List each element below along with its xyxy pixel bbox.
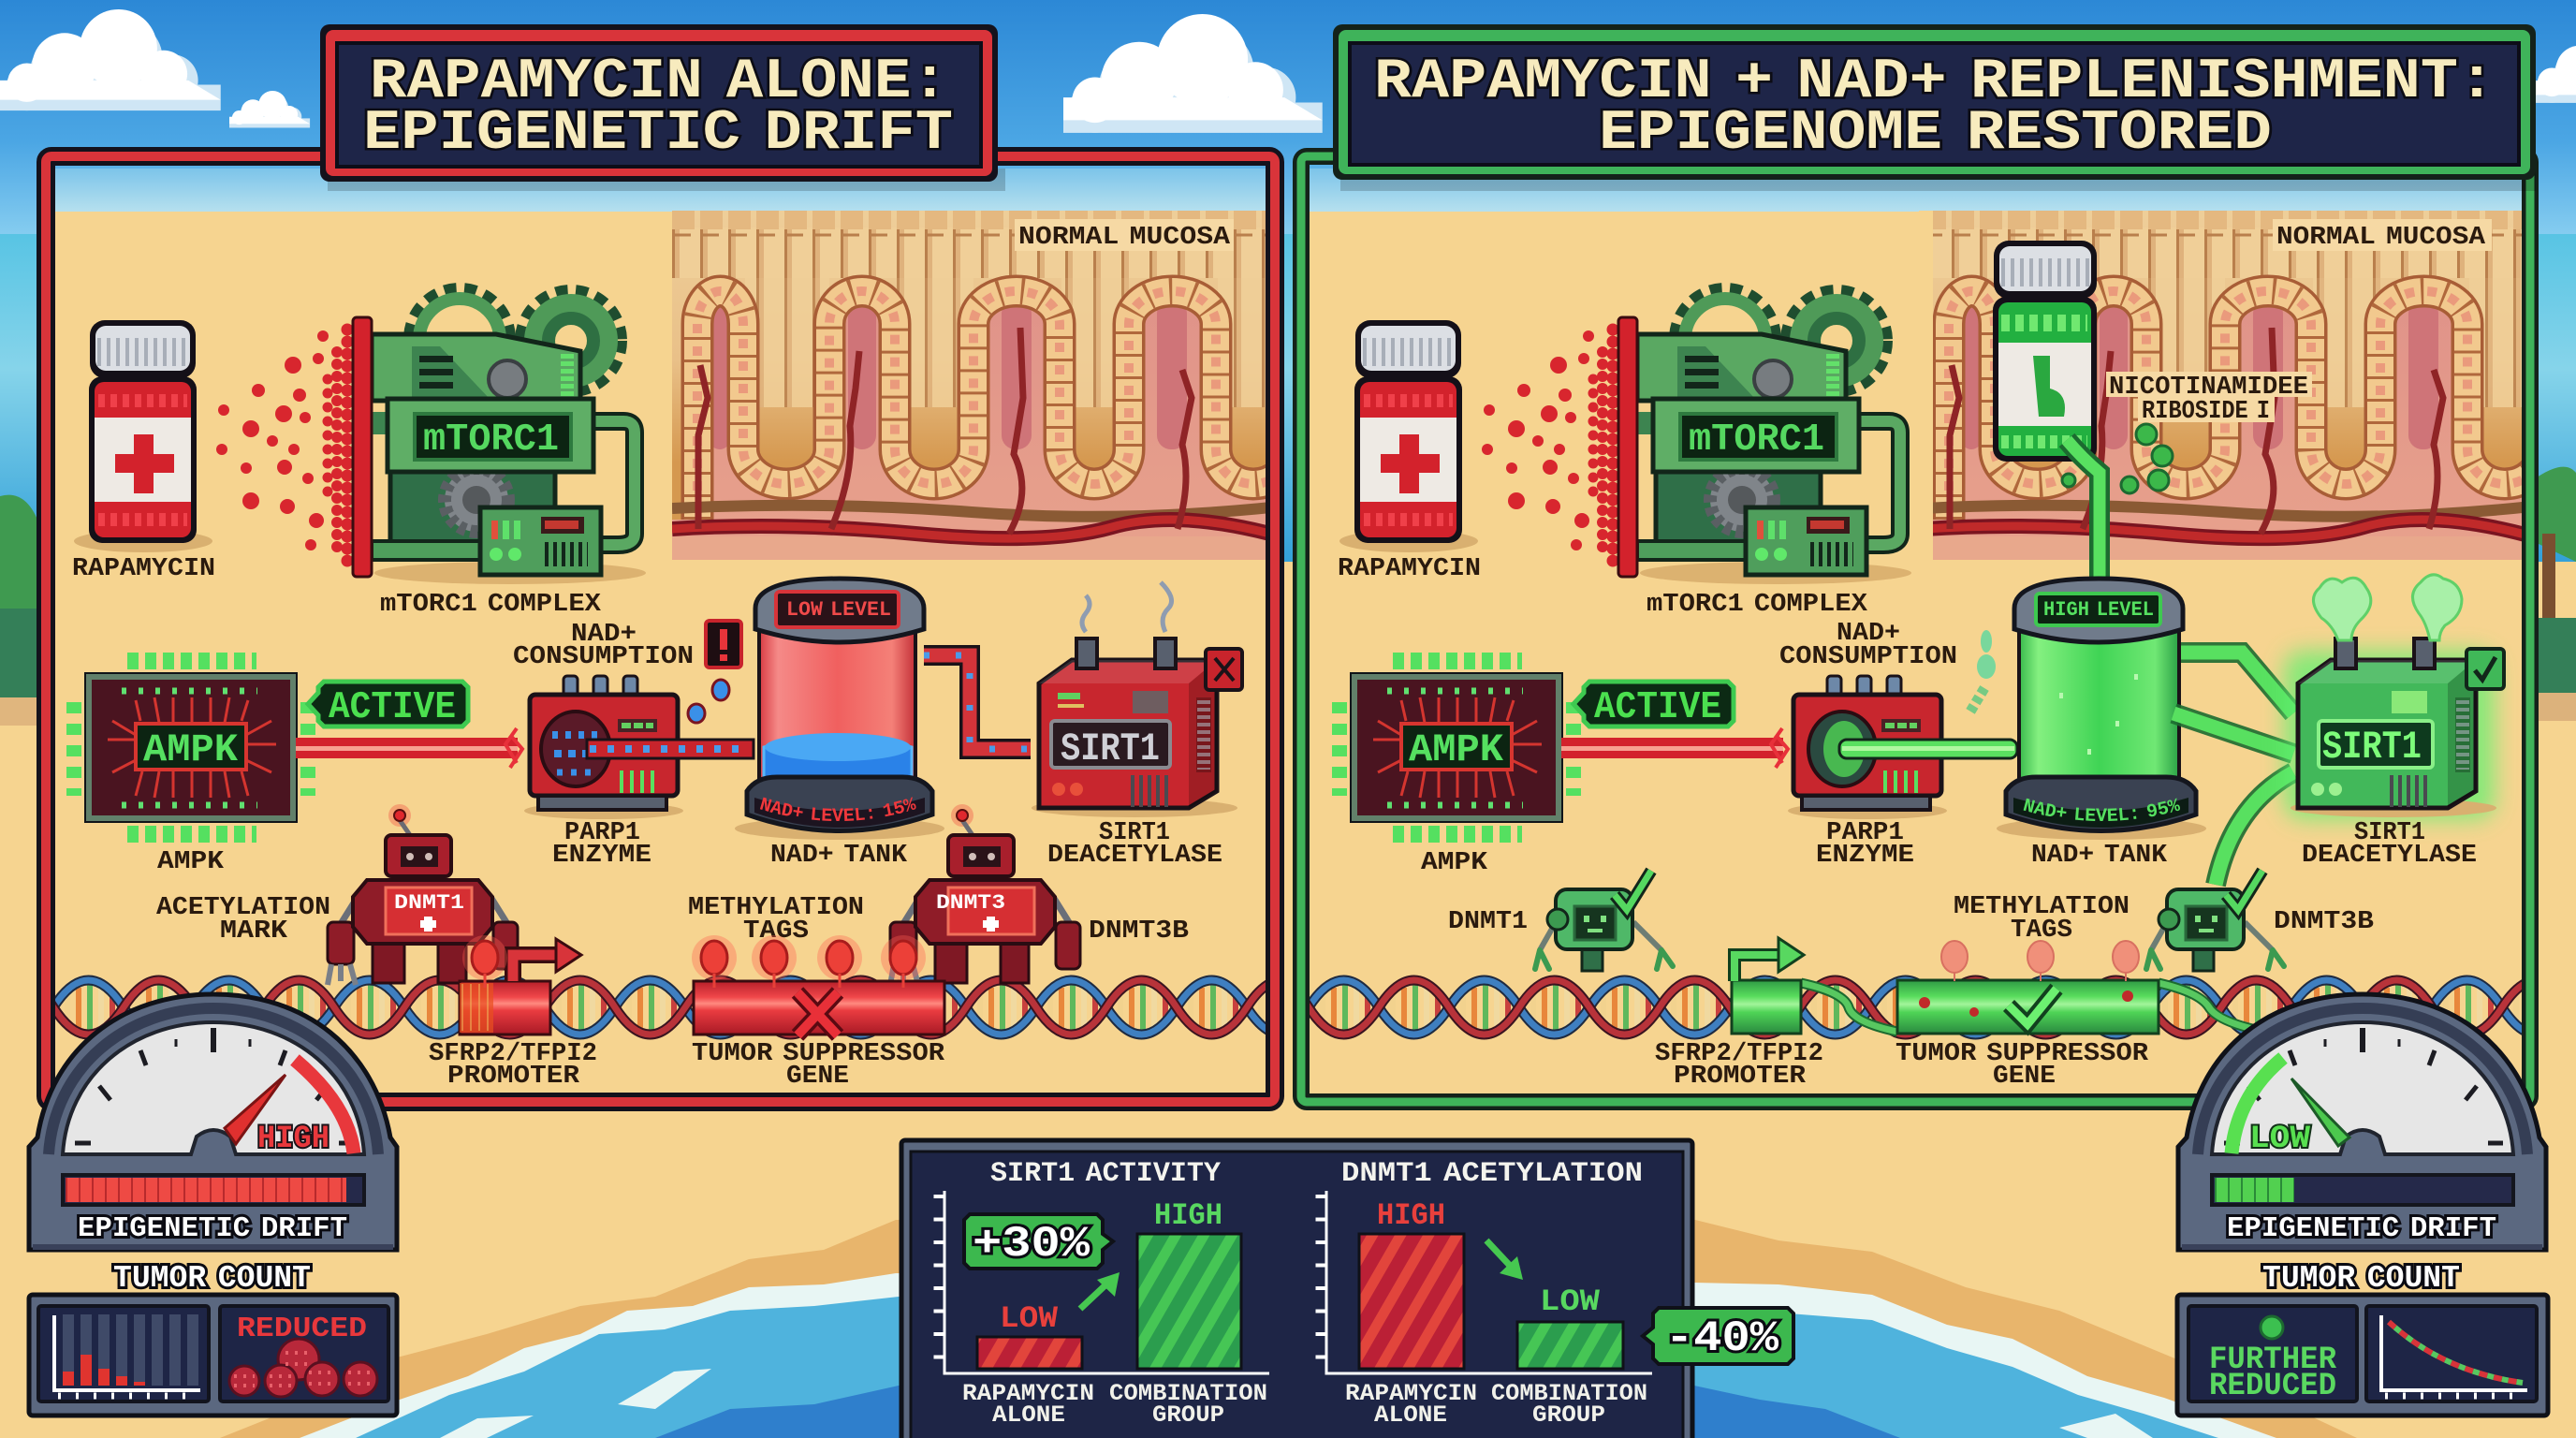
label: methylation tags right: TAGS xyxy=(2011,917,2072,945)
label: normal mucosa: NORMAL MUCOSA xyxy=(1018,224,1231,252)
green pipes to SIRT1 xyxy=(2174,653,2293,885)
panel: tumor count left xyxy=(29,1295,397,1416)
line chart xyxy=(2381,1315,2527,1396)
label: nicotinamide riboside: RIBOSIDE I xyxy=(2142,398,2270,426)
icon: X highlight xyxy=(798,992,838,1035)
label: methylation tags right: METHYLATION xyxy=(1954,893,2130,921)
labels: DNMT1 x axis: GROUP xyxy=(1532,1401,1605,1429)
label: SIRT1 deacetylase: DEACETYLASE xyxy=(1047,842,1222,870)
gauge bar xyxy=(66,1178,346,1202)
label: SIRT1 deacetylase: SIRT1 xyxy=(1099,819,1170,847)
icon: rapamycin bottle xyxy=(74,320,212,552)
label: PARP1 enzyme: ENZYME xyxy=(552,842,651,870)
AMPK chip right xyxy=(1339,661,1573,834)
bar: SIRT1 low xyxy=(977,1337,1082,1369)
label: SIRT1 deacetylase right xyxy=(2302,819,2477,870)
bar: SIRT1 high xyxy=(1137,1234,1241,1369)
gauge: epigenetic drift high xyxy=(29,994,397,1250)
gauge: epigenetic drift low xyxy=(2178,994,2546,1250)
label: tumor suppressor gene right: TUMOR SUPPRESSOR xyxy=(1895,1040,2149,1068)
NAD+ tank high xyxy=(1997,577,2206,840)
disc green xyxy=(1808,712,1876,786)
label: AMPK right: AMPK xyxy=(1421,849,1488,877)
label: DNMT3B: DNMT3B xyxy=(1089,917,1189,946)
label: NAD+ consumption: NAD+ xyxy=(571,621,637,649)
label: NAD+ consumption right: NAD+ xyxy=(1837,620,1900,648)
label: DNMT3B right: DNMT3B xyxy=(2274,908,2374,936)
label: SFRP2/TFPI2 promoter right: PROMOTER xyxy=(1674,1063,1807,1091)
NAD+ tank low xyxy=(735,577,944,840)
label: acetylation mark xyxy=(156,894,330,946)
palm right xyxy=(2537,467,2576,721)
label: AMPK: AMPK xyxy=(157,848,225,876)
text: high level: HIGH LEVEL xyxy=(2043,598,2154,622)
label: nicotinamide riboside: NICOTINAMIDEE xyxy=(2109,374,2308,402)
promoter cylinder green xyxy=(1732,980,1801,1034)
tag: active xyxy=(308,682,468,726)
bar chart tumor count xyxy=(54,1315,200,1396)
pipe: tank to PARP1 right xyxy=(1839,740,2017,758)
gauge needle xyxy=(225,1075,285,1144)
robot DNMT1 xyxy=(328,804,518,985)
label backdrop: normal mucosa right xyxy=(2273,219,2492,251)
heading: rapamycin alone: EPIGENETIC DRIFT xyxy=(363,102,953,166)
panel background left xyxy=(53,169,1268,1095)
icon: check on gene xyxy=(2009,989,2056,1024)
text: mTORC1 display right: mTORC1 xyxy=(1689,418,1824,462)
heading: rapamycin alone: RAPAMYCIN ALONE: xyxy=(370,51,948,114)
label: methylation tags: TAGS xyxy=(743,917,809,946)
arrow: up xyxy=(1080,1272,1120,1309)
panel border green xyxy=(1301,156,2530,1102)
mucosa edge cover xyxy=(1919,211,1933,560)
label: tumor count left: TUMOR COUNT xyxy=(113,1261,311,1296)
pipe: tank to SIRT1 xyxy=(924,655,1031,749)
residual methyl dots xyxy=(1919,990,2133,1017)
labels: DNMT1 x axis: COMBINATION xyxy=(1491,1380,1647,1407)
gauge arc green xyxy=(2232,1058,2283,1153)
cloud small xyxy=(229,91,310,127)
text: low green: LOW xyxy=(1540,1284,1601,1319)
text: SIRT1 display right: SIRT1 xyxy=(2322,725,2422,770)
cloud top right xyxy=(1063,14,1323,133)
arrow: promoter right xyxy=(1734,938,1804,981)
panel border red xyxy=(46,156,1275,1102)
label: SIRT1 deacetylase right: DEACETYLASE xyxy=(2302,842,2477,870)
text: reduced: REDUCED xyxy=(237,1313,367,1345)
label: PARP1 enzyme: PARP1 xyxy=(564,819,640,847)
text: further reduced: FURTHER xyxy=(2209,1343,2337,1378)
labels: SIRT1 x axis: RAPAMYCIN xyxy=(962,1380,1094,1407)
label: DNMT1 right: DNMT1 xyxy=(1448,908,1528,936)
text: DNMT3 chest: DNMT3 xyxy=(936,891,1005,915)
robot DNMT3B green xyxy=(2146,871,2284,971)
labels: DNMT1 x axis: ALONE xyxy=(1374,1401,1447,1429)
label: acetylation mark: MARK xyxy=(220,917,288,946)
label: tumor count right: TUMOR COUNT xyxy=(2262,1261,2460,1296)
label: SFRP2/TFPI2 promoter right xyxy=(1655,1040,1823,1091)
methylation tags faded xyxy=(1941,941,2139,981)
labels: SIRT1 x axis: COMBINATION xyxy=(1109,1380,1267,1407)
SIRT1 machine inactive xyxy=(1032,582,1242,817)
robot DNMT1 green xyxy=(1535,871,1673,971)
label: SFRP2/TFPI2 promoter: PROMOTER xyxy=(447,1063,580,1091)
DNA helix left xyxy=(0,980,1387,1034)
arrow: promoter xyxy=(513,939,581,981)
pipe: tank to PARP1 xyxy=(587,740,754,758)
panel: rapamycin + NAD+ xyxy=(1293,148,2539,1110)
badge: X xyxy=(1206,649,1242,690)
promoter cylinder xyxy=(460,981,550,1034)
label: rapamycin: RAPAMYCIN xyxy=(72,555,215,583)
mTORC1 machine right xyxy=(1618,292,1911,584)
chart axes DNMT1 xyxy=(1321,1191,1652,1373)
label: normal mucosa right: NORMAL MUCOSA xyxy=(2276,224,2486,252)
label: epigenetic drift: EPIGENETIC DRIFT xyxy=(78,1212,347,1245)
label: NAD+ tank: NAD+ TANK xyxy=(770,842,908,870)
icon: rapamycin bottle right xyxy=(1339,320,1478,552)
panel: rapamycin alone xyxy=(37,147,1284,1111)
mucosa right xyxy=(1914,201,2542,560)
labels: DNMT1 x axis: RAPAMYCIN xyxy=(1345,1380,1477,1407)
text: low: LOW xyxy=(1000,1301,1059,1336)
text: low: LOW xyxy=(2249,1122,2311,1157)
label: tumor suppressor gene: GENE xyxy=(786,1063,849,1091)
bar: DNMT1 high xyxy=(1359,1234,1464,1369)
deep sea xyxy=(655,1386,1900,1438)
icon: alert xyxy=(706,621,741,668)
text: -40%: -40% xyxy=(1665,1314,1778,1363)
label: PARP1 enzyme right xyxy=(1816,819,1914,870)
AMPK chip xyxy=(74,661,308,834)
heading: rapamycin + NAD+: RAPAMYCIN + NAD+ REPLENISHMENT: xyxy=(1374,51,2496,114)
text: +30%: +30% xyxy=(973,1220,1090,1269)
disc with blue NAD xyxy=(541,712,610,786)
text: further reduced: REDUCED xyxy=(2209,1369,2336,1404)
gauge needle green xyxy=(2291,1078,2349,1146)
label: rapamycin right: RAPAMYCIN xyxy=(1338,555,1481,583)
text: NAD+ level 95%: NAD+ LEVEL: 95% xyxy=(2024,798,2180,821)
palm left xyxy=(0,495,39,726)
tag: +30% xyxy=(964,1214,1113,1269)
label: PARP1 enzyme right: PARP1 xyxy=(1826,819,1904,847)
text: high: HIGH xyxy=(257,1122,329,1157)
label: nicotinamide riboside xyxy=(2106,372,2312,426)
mTORC1 machine xyxy=(353,292,646,584)
tag: -40% xyxy=(1643,1308,1793,1364)
label: SFRP2/TFPI2 promoter right: SFRP2/TFPI2 xyxy=(1655,1040,1823,1068)
rapamycin particles xyxy=(216,330,347,567)
label: NAD+ tank right: NAD+ TANK xyxy=(2031,842,2168,870)
text: AMPK chip right: AMPK xyxy=(1409,727,1504,772)
labels: DNMT1 x axis xyxy=(1345,1380,1647,1429)
PARP1 enzyme right xyxy=(1788,676,1947,819)
label: NAD+ consumption right xyxy=(1779,620,1957,671)
rapamycin particles right xyxy=(1482,330,1613,567)
label: SIRT1 deacetylase xyxy=(1047,819,1222,870)
label: SFRP2/TFPI2 promoter xyxy=(429,1040,597,1091)
drops: green trail xyxy=(1970,630,1996,712)
arrow: down xyxy=(1486,1240,1523,1280)
text: high red: HIGH xyxy=(1377,1198,1445,1233)
label: tumor suppressor gene: TUMOR SUPPRESSOR xyxy=(692,1040,945,1068)
icon: tumors xyxy=(229,1339,377,1397)
panel background right xyxy=(1309,169,2524,1095)
gene cylinder green xyxy=(1897,980,2159,1034)
arrow: activation beam right xyxy=(1561,728,1788,768)
tag: active right xyxy=(1573,682,1734,726)
text: active right: ACTIVE xyxy=(1594,686,1721,729)
label: NAD+ consumption xyxy=(513,621,694,671)
cloud left xyxy=(0,9,221,110)
heading: rapamycin + NAD+ xyxy=(1333,24,2536,191)
wet sand xyxy=(220,1220,2357,1438)
cloud far right xyxy=(2532,28,2576,103)
sea xyxy=(356,1297,2218,1438)
foam xyxy=(300,1273,2276,1438)
arrow: activation beam xyxy=(296,728,522,768)
text: active: ACTIVE xyxy=(329,686,456,729)
mucosa left xyxy=(663,201,1291,560)
gauge bar green xyxy=(2215,1178,2294,1202)
robot DNMT3 xyxy=(890,804,1080,985)
labels: SIRT1 x axis xyxy=(962,1380,1267,1429)
text: SIRT1 display: SIRT1 xyxy=(1061,726,1160,771)
label: tumor suppressor gene right: GENE xyxy=(1993,1063,2056,1091)
label: epigenetic drift right: EPIGENETIC DRIFT xyxy=(2227,1212,2496,1245)
heading: SIRT1 activity: SIRT1 ACTIVITY xyxy=(990,1158,1221,1190)
label: mTORC1 complex right: mTORC1 COMPLEX xyxy=(1647,591,1868,619)
labels: SIRT1 x axis: GROUP xyxy=(1152,1401,1224,1429)
text: further reduced xyxy=(2209,1343,2337,1404)
label backdrop: normal mucosa xyxy=(1015,219,1234,251)
text: AMPK on chip: AMPK xyxy=(143,727,239,772)
heading: rapamycin alone xyxy=(320,24,1005,191)
chart axes SIRT1 xyxy=(939,1191,1269,1373)
label: PARP1 enzyme xyxy=(552,819,651,870)
gauge arc red xyxy=(295,1060,354,1153)
label: SFRP2/TFPI2 promoter: SFRP2/TFPI2 xyxy=(429,1040,597,1068)
labels: SIRT1 x axis: ALONE xyxy=(992,1401,1065,1429)
heading: DNMT1 acetylation: DNMT1 ACETYLATION xyxy=(1341,1158,1643,1190)
heading: rapamycin + NAD+: EPIGENOME RESTORED xyxy=(1599,102,2272,166)
label: methylation tags xyxy=(688,894,864,946)
text: low level: LOW LEVEL xyxy=(786,598,891,622)
SIRT1 machine active xyxy=(2284,575,2504,819)
gene cylinder xyxy=(694,981,944,1034)
text: NAD+ level 15%: NAD+ LEVEL: 15% xyxy=(760,797,916,821)
label: NAD+ consumption: CONSUMPTION xyxy=(513,643,694,671)
panel: bar charts xyxy=(901,1140,1793,1438)
label: methylation tags right xyxy=(1954,893,2130,945)
text: mTORC1 display: mTORC1 xyxy=(423,418,559,462)
bar: DNMT1 low xyxy=(1517,1322,1623,1369)
label: mTORC1 complex: mTORC1 COMPLEX xyxy=(380,591,602,619)
label: methylation tags: METHYLATION xyxy=(688,894,864,922)
steam green xyxy=(2313,575,2462,640)
icon: NR bottle xyxy=(1993,241,2097,462)
text: high: HIGH xyxy=(1154,1198,1222,1233)
label: tumor suppressor gene right xyxy=(1895,1040,2149,1091)
icon: X on gene xyxy=(798,992,838,1035)
badge: check xyxy=(2466,649,2504,689)
text: DNMT1 chest: DNMT1 xyxy=(394,891,464,915)
label: acetylation mark: ACETYLATION xyxy=(156,894,330,922)
label: PARP1 enzyme right: ENZYME xyxy=(1816,842,1914,870)
panel: tumor count right xyxy=(2177,1295,2548,1416)
icon: green gem xyxy=(2261,1316,2283,1339)
drops: NAD+ xyxy=(688,680,729,723)
methylation tags xyxy=(462,935,926,988)
PARP1 enzyme xyxy=(524,676,683,819)
NR pour and particles xyxy=(2062,424,2173,580)
label: tumor suppressor gene xyxy=(692,1040,945,1091)
label: NAD+ consumption right: CONSUMPTION xyxy=(1779,643,1957,671)
label: SIRT1 deacetylase right: SIRT1 xyxy=(2354,819,2425,847)
DNA helix right xyxy=(1238,980,2576,1034)
